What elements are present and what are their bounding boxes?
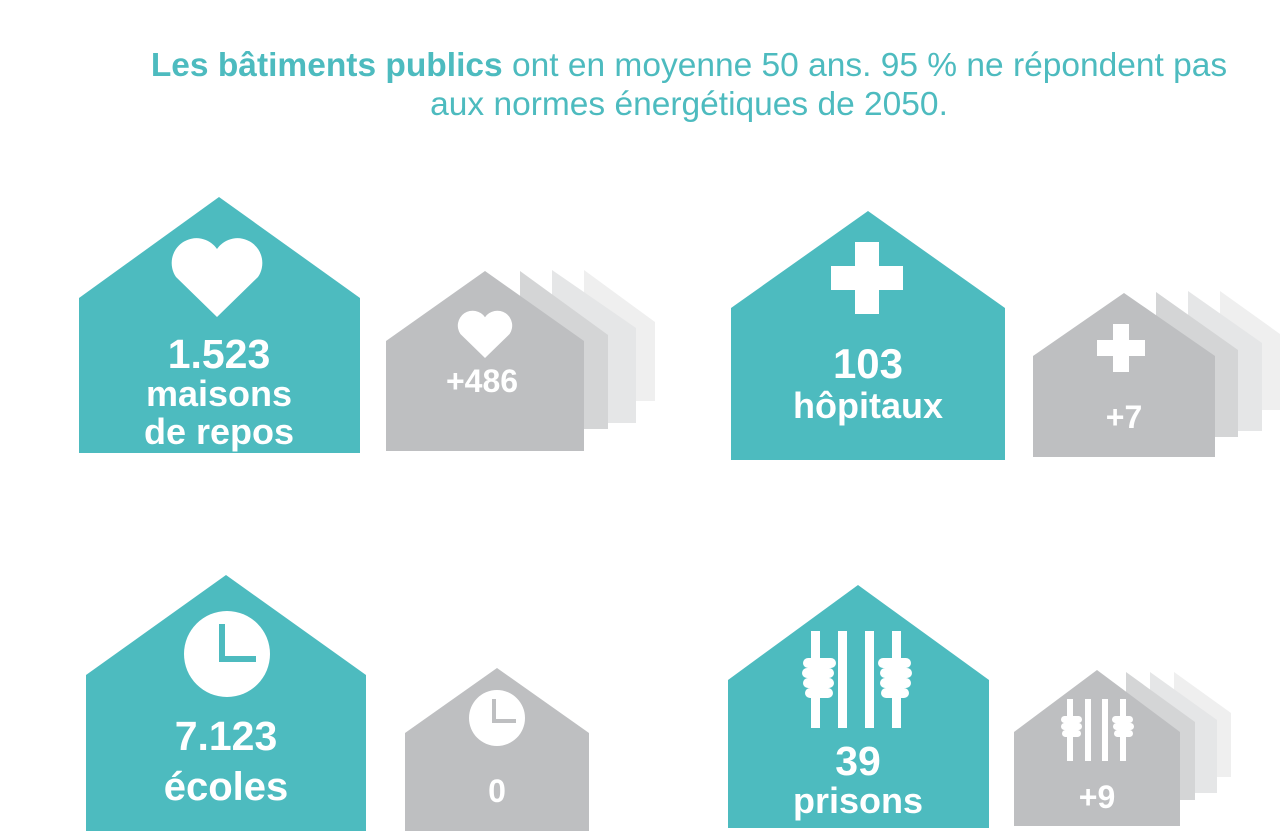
text: 7.123 écoles: 7.123 bbox=[175, 713, 277, 759]
panel: +486 stack bbox=[386, 270, 655, 451]
icon: heart small bbox=[458, 311, 512, 358]
text: +7: +7 bbox=[1106, 399, 1142, 435]
text: 103 hôpitaux: 103 bbox=[833, 340, 903, 387]
text: +486: +486 bbox=[446, 363, 518, 399]
icon: cross bbox=[831, 242, 903, 314]
text: 0: 0 bbox=[488, 773, 506, 809]
text: +9: +9 bbox=[1079, 779, 1115, 815]
panel: maisons de repos bbox=[79, 197, 360, 453]
text: 39 prisons: 39 bbox=[835, 738, 881, 784]
panel: +7 stack bbox=[1033, 291, 1280, 457]
panel: prisons bbox=[728, 585, 989, 828]
title: aux normes énergétiques de 2050. bbox=[430, 86, 948, 123]
text: 1.523 maisons de repos: 1.523 bbox=[168, 331, 270, 377]
text: 7.123 écoles: écoles bbox=[164, 765, 288, 809]
text: 39 prisons: prisons bbox=[793, 780, 923, 821]
panel: +9 stack bbox=[1014, 670, 1231, 826]
icon: prison bars small bbox=[1061, 699, 1134, 761]
panel: hôpitaux bbox=[731, 211, 1005, 460]
text: 1.523 maisons de repos: de repos bbox=[144, 411, 294, 452]
text: 103 hôpitaux: hôpitaux bbox=[793, 385, 943, 426]
icon: clock small bbox=[469, 690, 525, 746]
text: 1.523 maisons de repos: maisons bbox=[146, 373, 292, 414]
title: Les bâtiments publics ont en moyenne 50 ans. 95 % ne répondent pas bbox=[151, 47, 1227, 84]
icon: clock bbox=[184, 611, 270, 697]
icon: prison bars bbox=[802, 631, 912, 728]
icon: cross small bbox=[1097, 324, 1145, 372]
panel: 0 bbox=[405, 668, 589, 831]
title bbox=[151, 47, 1227, 123]
panel: écoles bbox=[86, 575, 366, 831]
icon: heart bbox=[172, 238, 262, 317]
